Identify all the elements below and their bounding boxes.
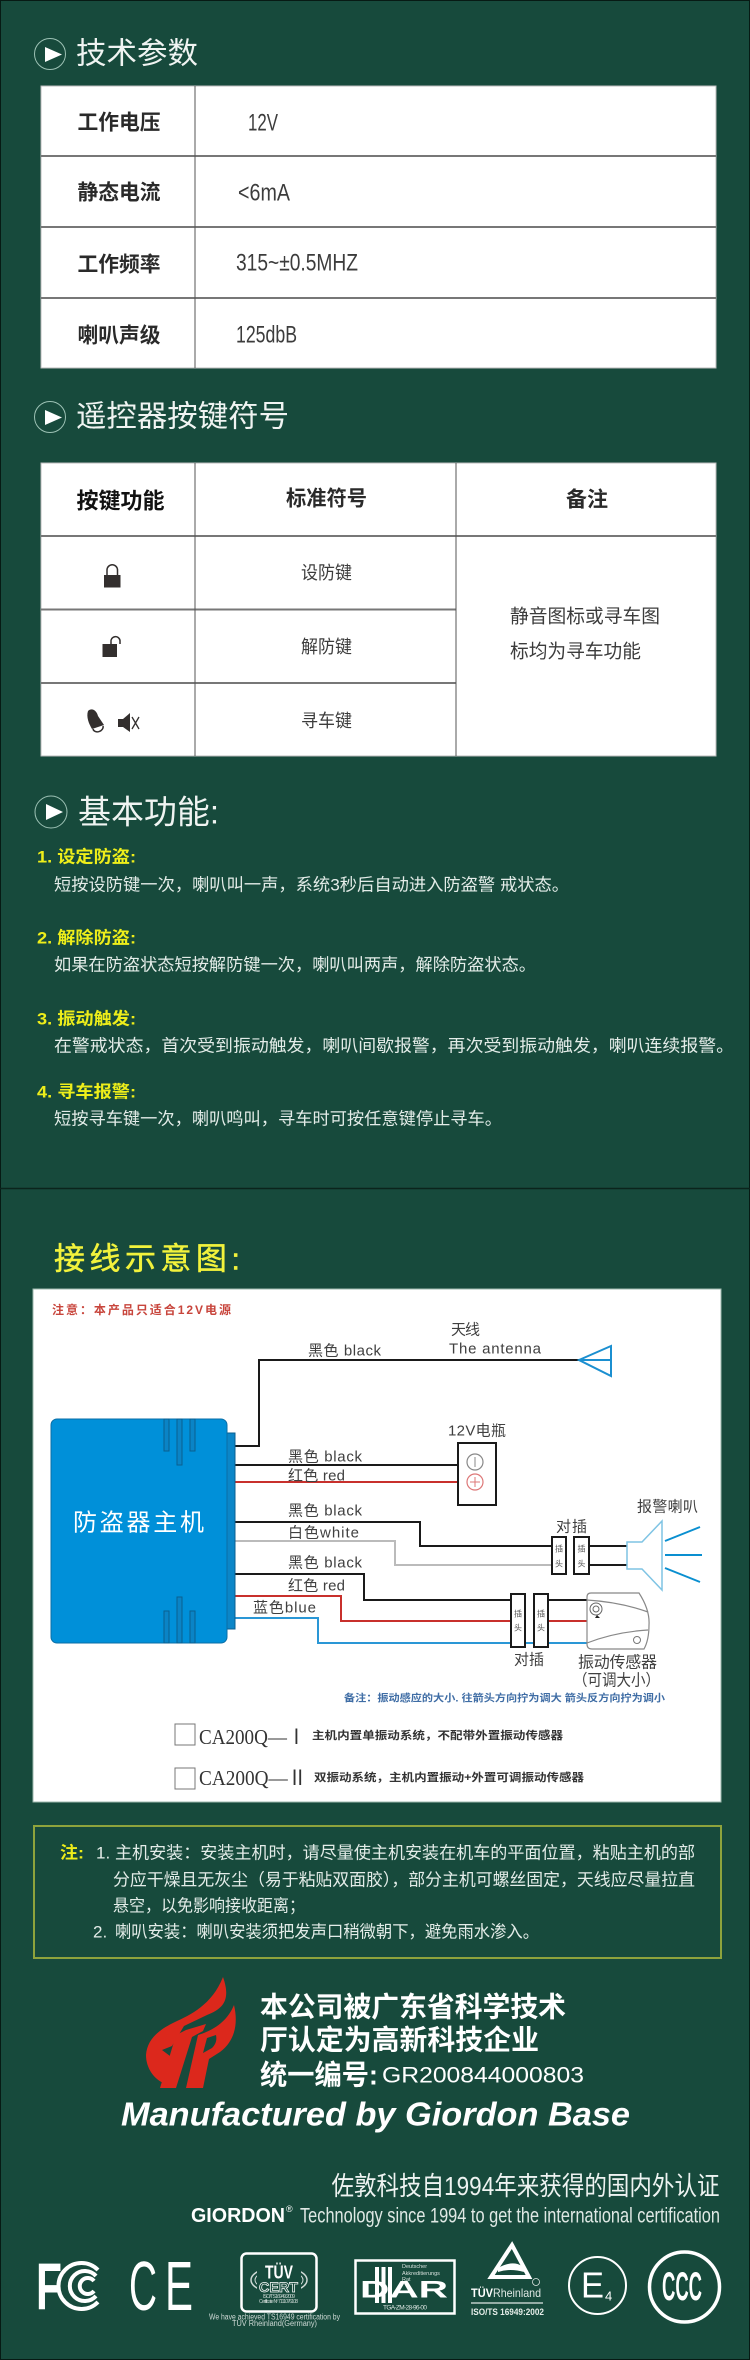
icon: play button	[34, 38, 66, 70]
table: remote key symbols: 设防键	[301, 563, 352, 583]
horn plugs: 头	[555, 1558, 563, 1568]
table: remote key symbols	[41, 463, 716, 756]
sensor plugs: 插	[537, 1608, 545, 1618]
logo: TUV cert	[209, 2254, 340, 2328]
table: remote key symbols: 寻车键	[301, 711, 352, 731]
battery	[448, 1422, 506, 1505]
table: remote key symbols: 静音图标或寻车图	[510, 606, 660, 628]
wire labels: 天线	[451, 1322, 480, 1338]
logo: DAR	[356, 2260, 454, 2314]
logo: TUV cert: TÜV	[265, 2262, 293, 2282]
logo: CCC: CCC	[662, 2265, 702, 2309]
wire labels: 黑色 black	[288, 1554, 362, 1572]
vibration sensor: 振动传感器	[578, 1654, 657, 1672]
table: remote key symbols: 备注	[566, 488, 608, 512]
table: technical parameters: 工作频率	[78, 254, 160, 276]
item 3	[37, 1008, 734, 1056]
main unit	[51, 1419, 235, 1643]
item 4: 4. 寻车报警:	[37, 1082, 136, 1102]
certification subheading: ®	[286, 2204, 293, 2214]
wire labels: 黑色 black	[288, 1502, 362, 1520]
panel: installation note: 1.	[96, 1844, 110, 1862]
battery: 12V电瓶	[448, 1422, 506, 1440]
icon: antenna	[579, 1346, 611, 1376]
logo: TUV cert: CERT	[259, 2279, 298, 2295]
wire labels: The antenna	[449, 1340, 542, 1358]
logo: DAR: Akkreditierungs	[402, 2271, 440, 2277]
certification statement: 厅认定为高新科技企业	[260, 2024, 539, 2056]
item 3: 3. 振动触发:	[37, 1008, 136, 1028]
panel: installation note: 注:	[60, 1842, 84, 1862]
logo: torch	[146, 1977, 236, 2088]
icon: play button	[35, 796, 67, 828]
wire labels: 白色white	[288, 1524, 359, 1542]
sensor plugs	[511, 1594, 548, 1668]
logo: CE: E	[165, 2247, 193, 2325]
option CA200Q-II	[175, 1766, 584, 1790]
item 2: 如果在防盗状态短按解防键一次，喇叭叫两声，解除防盗状态。	[54, 956, 536, 974]
table: remote key symbols: 按键功能	[76, 488, 164, 514]
item 3: 在警戒状态，首次受到振动触发，喇叭间歇报警，再次受到振动触发，喇叭连续报警。	[54, 1036, 734, 1056]
table: technical parameters: 喇叭声级	[78, 324, 160, 348]
sensor plugs: 头	[537, 1622, 545, 1632]
table: remote key symbols: 解防键	[301, 637, 352, 657]
certification statement	[260, 1992, 584, 2090]
item 2	[37, 928, 536, 974]
logo: TUV Rheinland	[471, 2245, 544, 2317]
certification statement: 统一编号:	[260, 2060, 378, 2090]
icon: lock	[104, 565, 120, 588]
item 1: 1. 设定防盗:	[37, 846, 136, 866]
wires	[235, 1360, 627, 1643]
table: remote key symbols: 标准符号	[286, 488, 367, 510]
table: technical parameters: 125dbB	[236, 322, 297, 348]
main unit: 防盗器主机	[73, 1510, 204, 1536]
table: technical parameters	[41, 86, 716, 368]
panel: installation note: 分应干燥且无灰尘（易于粘贴双面胶），部分主机可螺丝固定，天线应尽量拉直	[113, 1870, 695, 1890]
logo: E4	[569, 2257, 626, 2314]
horn plugs: 插	[578, 1544, 586, 1554]
warning note: 注意：本产品只适合12V电源	[52, 1302, 231, 1317]
table: technical parameters: 工作电压	[78, 112, 160, 134]
logo: E4: E	[581, 2264, 604, 2306]
logo: TUV cert: TÜV Rheinland(Germany)	[232, 2319, 317, 2328]
logo: TUV cert: We have achieved TS16949 certification by	[209, 2312, 340, 2322]
certification subheading: GIORDON	[191, 2205, 285, 2227]
sensor plugs: 头	[514, 1622, 522, 1632]
table: technical parameters: 12V	[248, 110, 278, 136]
panel: installation note	[34, 1826, 721, 1958]
heading: remote key symbols: 遥控器按键符号	[76, 400, 289, 434]
slogan: Manufactured by Giordon Base	[121, 2096, 630, 2132]
logo: TUV cert: Certificate Nº 7111076108	[259, 2299, 298, 2305]
vibration sensor: （可调大小）	[573, 1672, 660, 1690]
option CA200Q-I: 主机内置单振动系统，不配带外置振动传感器	[312, 1728, 563, 1742]
logo: CCC	[650, 2252, 720, 2322]
table: technical parameters: 315~±0.5MHZ	[236, 250, 358, 276]
wire labels: 黑色 black	[308, 1342, 382, 1360]
horn plugs	[552, 1518, 589, 1574]
logo: TUV Rheinland: TÜV	[471, 2285, 493, 2300]
wire labels: 红色 red	[288, 1578, 345, 1594]
icon: muted speaker	[118, 713, 139, 732]
heading: wiring diagram: 接线示意图:	[54, 1242, 240, 1276]
heading: basic functions: 基本功能:	[78, 794, 219, 830]
logo: FCC	[36, 2249, 98, 2323]
sensor plugs: 插	[514, 1608, 522, 1618]
panel: installation note: 2.	[93, 1922, 107, 1942]
wire labels: 黑色 black	[288, 1448, 362, 1466]
wire labels: 红色 red	[288, 1468, 345, 1484]
panel: basic functions	[35, 794, 734, 1128]
horn plugs: 对插	[556, 1518, 587, 1536]
item 4: 短按寻车键一次，喇叭鸣叫，寻车时可按任意键停止寻车。	[54, 1110, 502, 1128]
certification statement: 本公司被广东省科学技术	[260, 1992, 566, 2022]
horn plugs: 插	[555, 1544, 563, 1554]
panel: remote key symbols	[34, 400, 716, 756]
logo: DAR: DAR	[360, 2276, 448, 2304]
panel: technical parameters	[34, 38, 716, 368]
logo: TUV cert: ISO/TS16949:2009	[263, 2294, 295, 2300]
option CA200Q-I: CA200Q—Ⅰ	[199, 1725, 306, 1749]
icon: alarm horn: 报警喇叭	[637, 1498, 698, 1516]
icon: bell	[87, 709, 104, 732]
certification statement: GR200844000803	[382, 2062, 584, 2088]
logo: CE: C	[129, 2247, 157, 2325]
logo: DAR: Deutscher	[402, 2264, 427, 2270]
option CA200Q-II: CA200Q—Ⅱ	[199, 1766, 307, 1790]
logo: TUV Rheinland: ISO/TS 16949:2002	[471, 2307, 544, 2317]
panel: wiring diagram	[33, 1289, 721, 1802]
icon: unlock	[102, 637, 120, 657]
horn plugs: 头	[578, 1558, 586, 1568]
sensor plugs: 对插	[514, 1652, 544, 1668]
panel: installation note: 悬空，以免影响接收距离；	[113, 1896, 305, 1916]
logo: DAR: Rat	[402, 2277, 411, 2283]
item 2: 2. 解除防盗:	[37, 928, 136, 948]
icon: play button	[34, 402, 66, 432]
item 1: 短按设防键一次，喇叭叫一声，系统3秒后自动进入防盗警 戒状态。	[54, 876, 569, 894]
item 1	[37, 846, 569, 894]
sensor note: 备注：振动感应的大小. 往箭头方向拧为调大 箭头反方向拧为调小	[344, 1692, 665, 1704]
vibration sensor	[573, 1593, 660, 1690]
panel: installation note: 喇叭安装：喇叭安装须把发声口稍微朝下，避免雨水渗入。	[115, 1922, 539, 1942]
logo: TUV Rheinland: Rheinland	[493, 2286, 541, 2300]
option CA200Q-II: 双振动系统，主机内置振动+外置可调振动传感器	[314, 1770, 584, 1784]
logo: E4: 4	[605, 2288, 612, 2304]
logo: FCC: F	[36, 2249, 62, 2323]
table: technical parameters: <6mA	[238, 180, 290, 206]
panel: international certifications	[36, 2171, 720, 2328]
icon: alarm horn	[627, 1498, 702, 1590]
wire labels	[253, 1322, 542, 1616]
option CA200Q-I	[175, 1724, 563, 1749]
wire labels: 蓝色blue	[253, 1600, 316, 1616]
logo: DAR: TGA-ZM-28-96-00	[383, 2304, 427, 2312]
heading: technical parameters: 技术参数	[76, 38, 198, 70]
item 4	[37, 1082, 502, 1128]
table: technical parameters: 静态电流	[78, 180, 160, 204]
table: remote key symbols: 标均为寻车功能	[510, 640, 641, 662]
panel: installation note: 主机安装：安装主机时，请尽量使主机安装在机车的平面位置，粘贴主机的部	[115, 1842, 695, 1862]
